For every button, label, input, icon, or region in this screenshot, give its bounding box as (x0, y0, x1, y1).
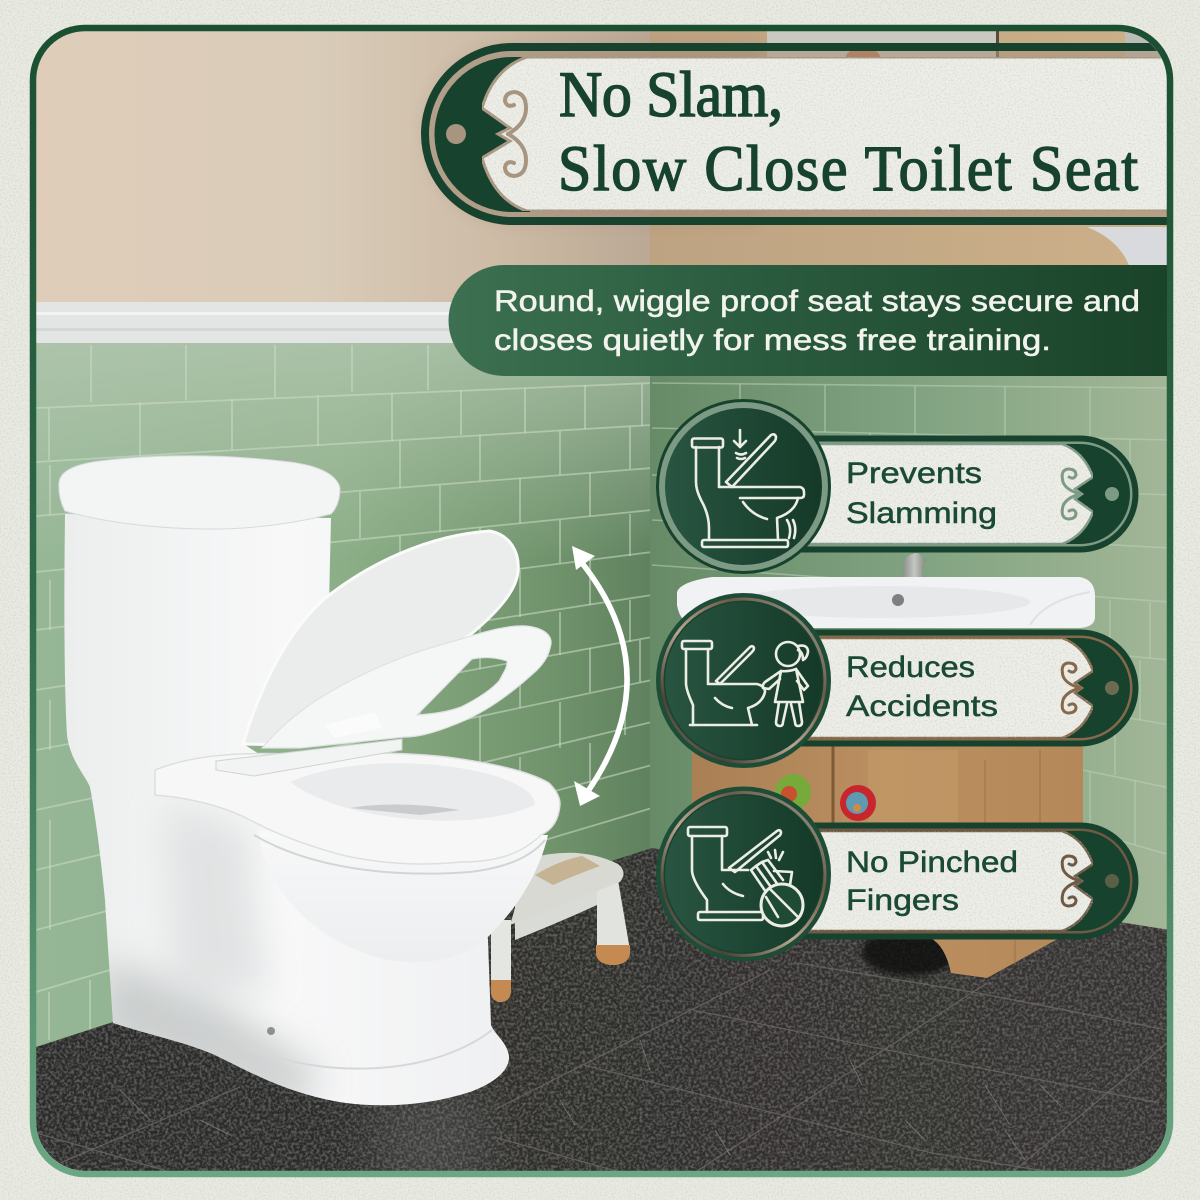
seat ring (262, 626, 551, 748)
feature: no pinched fingers (656, 786, 1135, 962)
feature: prevents slamming (656, 399, 1135, 574)
feature label: No Pinched (846, 846, 1018, 879)
banner gap tint (429, 51, 1167, 217)
feature label: Prevents (846, 457, 982, 490)
icon disc (656, 593, 831, 768)
left wall tiles (36, 342, 652, 1060)
subtitle text: closes quietly for mess free training. (494, 324, 1051, 357)
white toilet (59, 456, 560, 1110)
hinge plate (216, 739, 402, 776)
floor (36, 848, 1170, 1200)
feature label: Accidents (846, 690, 998, 723)
feature label (846, 457, 997, 530)
subtitle text: Round, wiggle proof seat stays secure and (494, 285, 1140, 318)
wall bracket (1087, 227, 1167, 265)
cabinet knobs (775, 774, 876, 821)
banner crescent (434, 57, 530, 212)
feature: reduces accidents (656, 593, 1135, 768)
banner shadow (473, 54, 488, 208)
picture on wall (767, 31, 1160, 57)
wooden cabinet (692, 725, 1083, 978)
sink (677, 553, 1095, 628)
icon disc (656, 786, 831, 962)
right wall upper (650, 31, 1167, 265)
title text: No Slam, (559, 58, 783, 131)
feature label: Reduces (846, 651, 975, 684)
feature label (846, 651, 998, 723)
underside shadow (165, 802, 270, 995)
bowl (480, 834, 548, 938)
toilet body (64, 514, 509, 1105)
subtitle banner (449, 265, 1167, 376)
banner paper (482, 57, 1170, 211)
subtitle text (494, 285, 1140, 357)
pill tag (760, 438, 1135, 550)
open close arrow (572, 546, 627, 806)
title text (560, 70, 1138, 192)
open lid (243, 531, 518, 745)
icon: toilet with lid closing softly (692, 430, 804, 547)
feature label (846, 846, 1018, 917)
icon: toilet with child (682, 641, 808, 726)
icon: toilet with pinched hand prohibited (688, 827, 803, 926)
bowl rim (155, 753, 560, 864)
icon disc (656, 399, 831, 574)
banner outline (425, 47, 1170, 221)
crescent hole (446, 124, 466, 144)
title text: Slow Close Toilet Seat (558, 132, 1138, 205)
chair rail (36, 302, 466, 343)
feature label: Fingers (846, 884, 959, 917)
feature label: Slamming (846, 497, 997, 530)
right wall tiles (650, 376, 1170, 930)
step stool (491, 853, 630, 1002)
title banner (425, 47, 1170, 221)
left wall upper (36, 31, 652, 311)
pill tag (760, 632, 1135, 744)
pill tag (760, 826, 1135, 936)
tank lid (59, 456, 340, 529)
banner scroll ornament (505, 92, 526, 176)
lower left shading (100, 960, 320, 1110)
